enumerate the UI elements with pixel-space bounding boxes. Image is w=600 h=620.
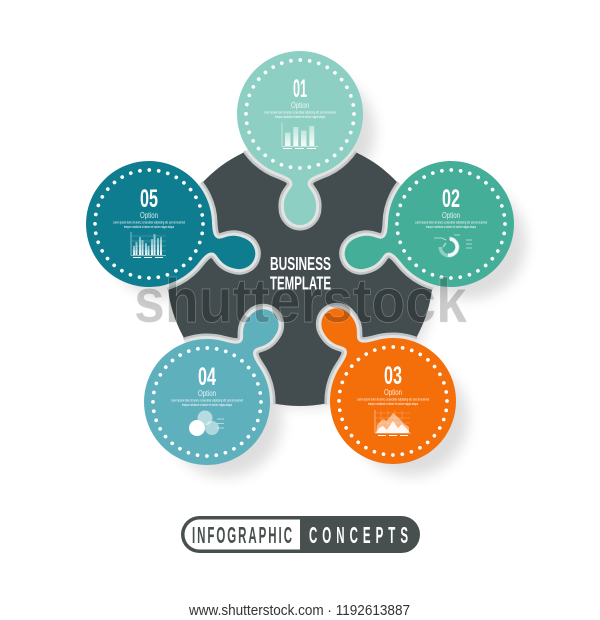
badge right word: CONCEPTS xyxy=(309,523,408,548)
option label: Option xyxy=(384,388,402,397)
body text: tempor incididunt ut labore et dolore magna aliqua xyxy=(124,225,174,229)
stock id footer: www.shutterstock.com · 1192613887 xyxy=(188,603,410,619)
body text: tempor incididunt ut labore et dolore magna aliqua xyxy=(426,225,476,229)
panel: option 04 xyxy=(119,275,323,490)
option label: Option xyxy=(198,389,216,398)
puzzle piece 04 xyxy=(119,275,323,490)
number 03: 03 xyxy=(384,362,402,390)
soft cast shadows xyxy=(110,75,526,477)
body text xyxy=(171,398,243,407)
puzzle piece 05 xyxy=(70,145,274,318)
body text: Lorem ipsum dolor sit amet, consectetur adipiscing elit, sed do eiusmod xyxy=(357,398,429,402)
body text xyxy=(415,220,487,229)
dotted ring xyxy=(153,348,261,456)
area chart xyxy=(375,410,411,436)
dotted ring xyxy=(339,347,447,455)
number 05: 05 xyxy=(140,185,158,213)
dotted ring xyxy=(246,60,354,168)
watermark: shutterstock xyxy=(134,267,467,336)
number 04: 04 xyxy=(198,363,216,391)
body text xyxy=(113,220,185,229)
body text: Lorem ipsum dolor sit amet, consectetur adipiscing elit, sed do eiusmod xyxy=(113,220,185,224)
bar chart xyxy=(282,123,318,148)
panel: option 03 xyxy=(277,274,481,489)
puzzle piece 02 xyxy=(326,145,530,318)
body text: tempor incididunt ut labore et dolore magna aliqua xyxy=(275,115,325,119)
badge left word: INFOGRAPHIC xyxy=(192,523,292,548)
panel: option 01 xyxy=(237,51,363,225)
panel: option 02 xyxy=(326,145,530,318)
dotted ring xyxy=(397,170,505,278)
panel: option 05 xyxy=(70,145,274,318)
puzzle piece 03 xyxy=(277,274,481,489)
center heading xyxy=(270,254,331,294)
dotted ring xyxy=(95,170,203,278)
option label: Option xyxy=(442,211,460,220)
grouped bar chart xyxy=(131,232,166,258)
center heading: BUSINESS xyxy=(270,254,331,274)
body text: tempor incididunt ut labore et dolore magna aliqua xyxy=(368,402,418,406)
body text: Lorem ipsum dolor sit amet, consectetur adipiscing elit, sed do eiusmod xyxy=(264,110,336,114)
body text: Lorem ipsum dolor sit amet, consectetur adipiscing elit, sed do eiusmod xyxy=(415,220,487,224)
number 02: 02 xyxy=(442,185,460,213)
body text: Lorem ipsum dolor sit amet, consectetur adipiscing elit, sed do eiusmod xyxy=(171,398,243,402)
badge: infographic concepts xyxy=(181,516,420,553)
donut chart xyxy=(434,235,472,258)
body text xyxy=(264,110,336,119)
option label: Option xyxy=(140,211,158,220)
puzzle piece 01 xyxy=(237,51,363,225)
puzzle rims around the pieces xyxy=(167,150,434,405)
body text: tempor incididunt ut labore et dolore magna aliqua xyxy=(182,403,232,407)
number 01: 01 xyxy=(293,75,307,103)
option label: Option xyxy=(291,101,309,110)
body text xyxy=(357,398,429,406)
venn diagram xyxy=(189,410,224,436)
central dark disc xyxy=(167,140,433,406)
center heading: TEMPLATE xyxy=(270,274,331,294)
